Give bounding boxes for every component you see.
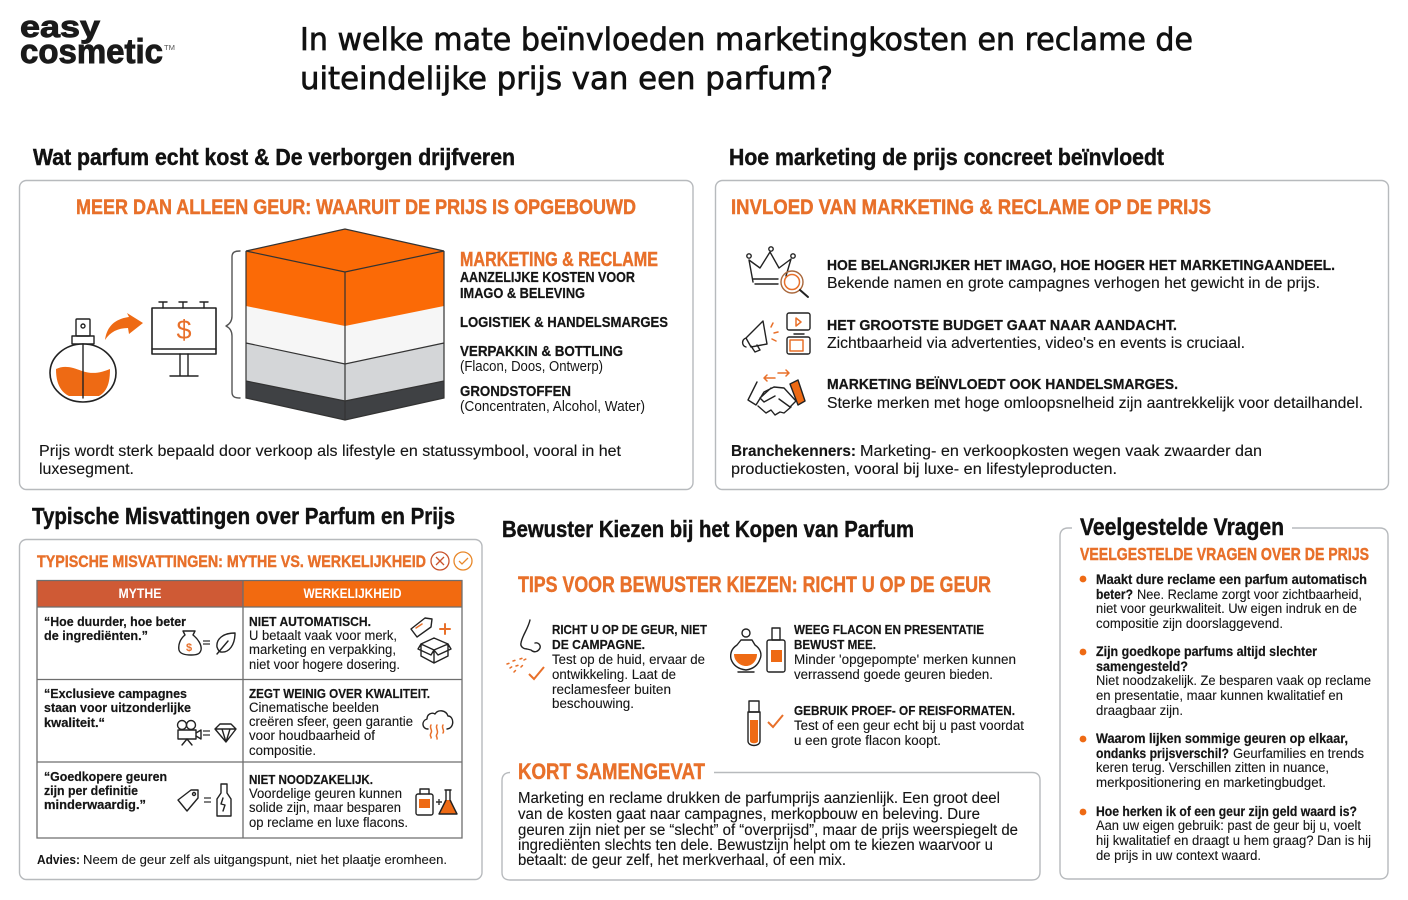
tip 3 [794,703,1024,748]
row 2 reality: compositie. [249,743,316,758]
faq 1: beter? [1096,587,1133,602]
faq 2 [1080,644,1371,718]
icon: billboard with dollar sign: $ [176,315,192,345]
cube labels: (Flacon, Doos, Ontwerp) [460,359,603,375]
summary text: ingrediënten slechts ten dele. Bewustzijn helpt om te kiezen waarvoor u [518,837,993,854]
panel heading: typische misvattingen: TYPISCHE MISVATTINGEN: MYTHE VS. WERKELIJKHEID [37,552,426,571]
faq 4 [1080,804,1371,863]
faq 4: hij kwalitatief en draagt u hem graag? Dan is hij [1096,833,1371,848]
tips heading: TIPS VOOR BEWUSTER KIEZEN: RICHT U OP DE GEUR [518,572,991,597]
faq 3: ondanks prijsverschil? [1096,746,1229,761]
row 1 myth: “Hoe duurder, hoe beter [44,614,186,629]
row 1 myth [44,614,186,643]
faq 2: Zijn goedkope parfums altijd slechter [1096,644,1318,659]
summary text: geuren zijn niet per se “slecht” of “overprijsd”, maar de prijs weerspiegelt de [518,822,1018,839]
panel: veelgestelde vragen [1060,514,1388,879]
heading: bewuster kiezen: Bewuster Kiezen bij het Kopen van Parfum [502,516,914,542]
tip 2: BEWUST MEE. [794,637,876,652]
faq 3 [1080,731,1364,790]
row 1 reality: U betaalt vaak voor merk, [249,628,397,643]
row 3 reality: NIET NOODZAKELIJK. [249,772,373,787]
icon: money bag equals leaf: $ [186,642,192,654]
heading: typische misvattingen: Typische Misvattingen over Parfum en Prijs [32,503,455,529]
faq 1: niet voor geurkwaliteit. Uw eigen indruk en de [1096,601,1357,616]
item: imago [827,257,1335,292]
row 3 myth [44,769,167,812]
faq 2: Niet noodzakelijk. Ze besparen vaak op reclame [1096,673,1371,688]
item: budget: Zichtbaarheid via advertenties, video's en events is cruciaal. [827,335,1245,352]
row 3 reality [249,772,408,830]
cube labels [460,249,668,415]
advice line: Neem de geur zelf als uitgangspunt, niet het plaatje eromheen. [83,853,447,867]
table: mythe en werkelijkheid: MYTHE [118,586,162,601]
advice line: Advies: [37,853,80,867]
icon: camera equals diamond [178,720,236,745]
icon: cross in circle [431,552,449,570]
panel text: branchekenners [731,443,1262,478]
cube labels: GRONDSTOFFEN [460,383,571,400]
icon: tag equals bottle [178,784,231,816]
title: uiteindelijke prijs van een parfum? [300,61,833,97]
tip 2: verrassend goede geuren bieden. [794,667,993,682]
summary text: Marketing en reclame drukken de parfumprijs aanzienlijk. Een groot deel [518,790,1000,807]
row 3 reality: op reclame en luxe flacons. [249,815,408,830]
faq 4: Hoe herken ik of een geur zijn geld waard is? [1096,804,1357,819]
panel text: branchekenners: Branchekenners: [731,443,856,460]
tip 3: GEBRUIK PROEF- OF REISFORMATEN. [794,703,1015,718]
icon: perfume bottle [50,319,116,402]
icon: tag plus box [411,618,451,663]
row 2 myth [44,686,191,730]
row 2 reality: voor houdbaarheid of [249,728,375,743]
icon: billboard with dollar sign [152,302,216,376]
panel: invloed van marketing [716,180,1388,490]
logo: easy cosmetic [20,9,175,71]
tip 1: RICHT U OP DE GEUR, NIET [552,622,707,637]
title: In welke mate beïnvloeden marketingkosten en reclame de [300,22,1193,58]
panel text: branchekenners: productiekosten, vooral bij luxe- en lifestyleproducten. [731,461,1117,478]
item: budget: HET GROOTSTE BUDGET GAAT NAAR AANDACHT. [827,317,1177,334]
faq 3: merkpositionering en marketingbudget. [1096,775,1326,790]
tip 3: u een grote flacon koopt. [794,733,941,748]
row 3 myth: zijn per definitie [44,783,138,798]
item: handelsmarges [827,376,1363,412]
faq 2: draagbaar zijn. [1096,703,1183,718]
logo: easy cosmetic: TM [164,45,175,52]
faq 3: keren terug. Verschillen zitten in nuance, [1096,760,1329,775]
faq 2: en presentatie, maar kunnen kwalitatief en [1096,688,1343,703]
item: imago: Bekende namen en grote campagnes verhogen het gewicht in de prijs. [827,275,1320,292]
summary text: betaalt: de geur zelf, het merkverhaal, of een mix. [518,852,846,869]
panel text: prijs bepaald door verkoop: luxesegment. [39,461,134,478]
row 2 myth: “Exclusieve campagnes [44,686,187,701]
tip 1: beschouwing. [552,696,634,711]
heading: veelgestelde vragen: Veelgestelde Vragen [1080,514,1284,541]
panel text: branchekenners: Marketing- en verkoopkosten wegen vaak zwaarder dan [860,443,1262,460]
row 2 reality: Cinematische beelden [249,700,379,715]
row 1 myth: de ingrediënten.” [44,628,148,643]
tip 1: reclamesfeer buiten [552,682,671,697]
arrow: perfume to billboard [105,313,143,340]
tip 1 [552,622,707,711]
row 1 reality: niet voor hogere dosering. [249,657,400,672]
row 2 reality: creëren sfeer, geen garantie [249,714,413,729]
heading: wat parfum echt kost: Wat parfum echt kost & De verborgen drijfveren [33,144,515,170]
row 2 reality [249,686,430,758]
panel: mythe vs werkelijkheid [20,540,482,880]
logo: easy cosmetic: easy [20,9,101,44]
heading: hoe marketing de prijs beïnvloedt: Hoe marketing de prijs concreet beïnvloedt [729,144,1164,170]
icon: sample vial and check [748,701,783,746]
icon: money bag equals leaf [179,631,235,655]
row 2 reality: ZEGT WEINIG OVER KWALITEIT. [249,686,430,701]
icon: check in circle [454,552,472,570]
panel text: prijs bepaald door verkoop [39,443,622,478]
section: tips voor bewuster kiezen [507,572,1024,748]
row 3 reality: solide zijn, maar besparen [249,800,401,815]
faq 1: Maakt dure reclame een parfum automatisch [1096,572,1367,587]
cube labels: MARKETING & RECLAME [460,249,658,271]
item: imago: HOE BELANGRIJKER HET IMAGO, HOE HOGER HET MARKETINGAANDEEL. [827,257,1335,274]
cube labels: LOGISTIEK & HANDELSMARGES [460,314,668,331]
faq 3: Geurfamilies en trends [1233,746,1364,761]
title [300,22,1193,97]
panel heading: meer dan alleen geur: MEER DAN ALLEEN GEUR: WAARUIT DE PRIJS IS OPGEBOUWD [76,196,636,219]
brace [226,251,240,398]
tip 1: Test op de huid, ervaar de [552,652,705,667]
row 2 myth: staan voor uitzonderlijke [44,700,191,715]
icon: crown with magnifier [747,247,808,297]
tip 1: DE CAMPAGNE. [552,637,645,652]
faq 2: samengesteld? [1096,659,1188,674]
icon: handshake with arrows [748,370,805,415]
icon: perfume flacon and spray bottle [731,628,785,672]
cube labels: AANZELIJKE KOSTEN VOOR [460,269,635,286]
row 2 myth: kwaliteit.“ [44,715,105,730]
logo: easy cosmetic: cosmetic [20,33,163,71]
icon: cloud with scent [423,711,453,739]
icon: nose with spray and check [507,620,544,679]
chart: cost layers cube [246,229,444,420]
cube labels: IMAGO & BELEVING [460,285,585,302]
item: budget [827,317,1245,352]
faq 1 [1080,572,1367,631]
item: handelsmarges: Sterke merken met hoge omloopsnelheid zijn aantrekkelijk voor detailhandel. [827,395,1363,412]
item: handelsmarges: MARKETING BEÏNVLOEDT OOK HANDELSMARGES. [827,376,1178,393]
faq 1: compositie zijn doorslaggevend. [1096,616,1283,631]
summary text: van de kosten gaat naar campagnes, merkopbouw en beleving. Dure [518,806,980,823]
cube labels: (Concentraten, Alcohol, Water) [460,399,645,415]
cube labels: VERPAKKIN & BOTTLING [460,343,623,360]
faq 4: Aan uw eigen gebruik: past de geur bij u, voelt [1096,818,1361,833]
panel heading: invloed van marketing: INVLOED VAN MARKETING & RECLAME OP DE PRIJS [731,196,1211,219]
panel: prijsopbouw [20,180,693,490]
row 3 reality: Voordelige geuren kunnen [249,786,402,801]
row 3 myth: minderwaardig.” [44,797,146,812]
tip 2: Minder 'opgepompte' merken kunnen [794,652,1016,667]
row 1 reality: marketing en verpakking, [249,642,396,657]
faq 4: de prijs in uw context waard. [1096,848,1261,863]
row 1 reality: NIET AUTOMATISCH. [249,614,371,629]
panel heading: kort samengevat: KORT SAMENGEVAT [518,759,705,784]
tip 1: ontwikkeling. Laat de [552,667,676,682]
tip 2: WEEG FLACON EN PRESENTATIE [794,622,984,637]
icon: bottle plus flask [416,789,457,815]
faq 1: Nee. Reclame zorgt voor zichtbaarheid, [1137,587,1362,602]
row 3 myth: “Goedkopere geuren [44,769,167,784]
faq 3: Waarom lijken sommige geuren op elkaar, [1096,731,1348,746]
tip 2 [794,622,1016,682]
panel: kort samengevat [502,759,1040,880]
icon: megaphone and screens [743,313,810,354]
row 1 reality [249,614,400,672]
summary text [518,790,1018,869]
table: mythe en werkelijkheid: WERKELIJKHEID [304,586,402,601]
table: mythe en werkelijkheid [37,580,462,838]
panel text: prijs bepaald door verkoop: Prijs wordt sterk bepaald door verkoop als lifestyle en statussymbool, vooral in het [39,443,622,460]
tip 3: Test of een geur echt bij u past voordat [794,718,1024,733]
